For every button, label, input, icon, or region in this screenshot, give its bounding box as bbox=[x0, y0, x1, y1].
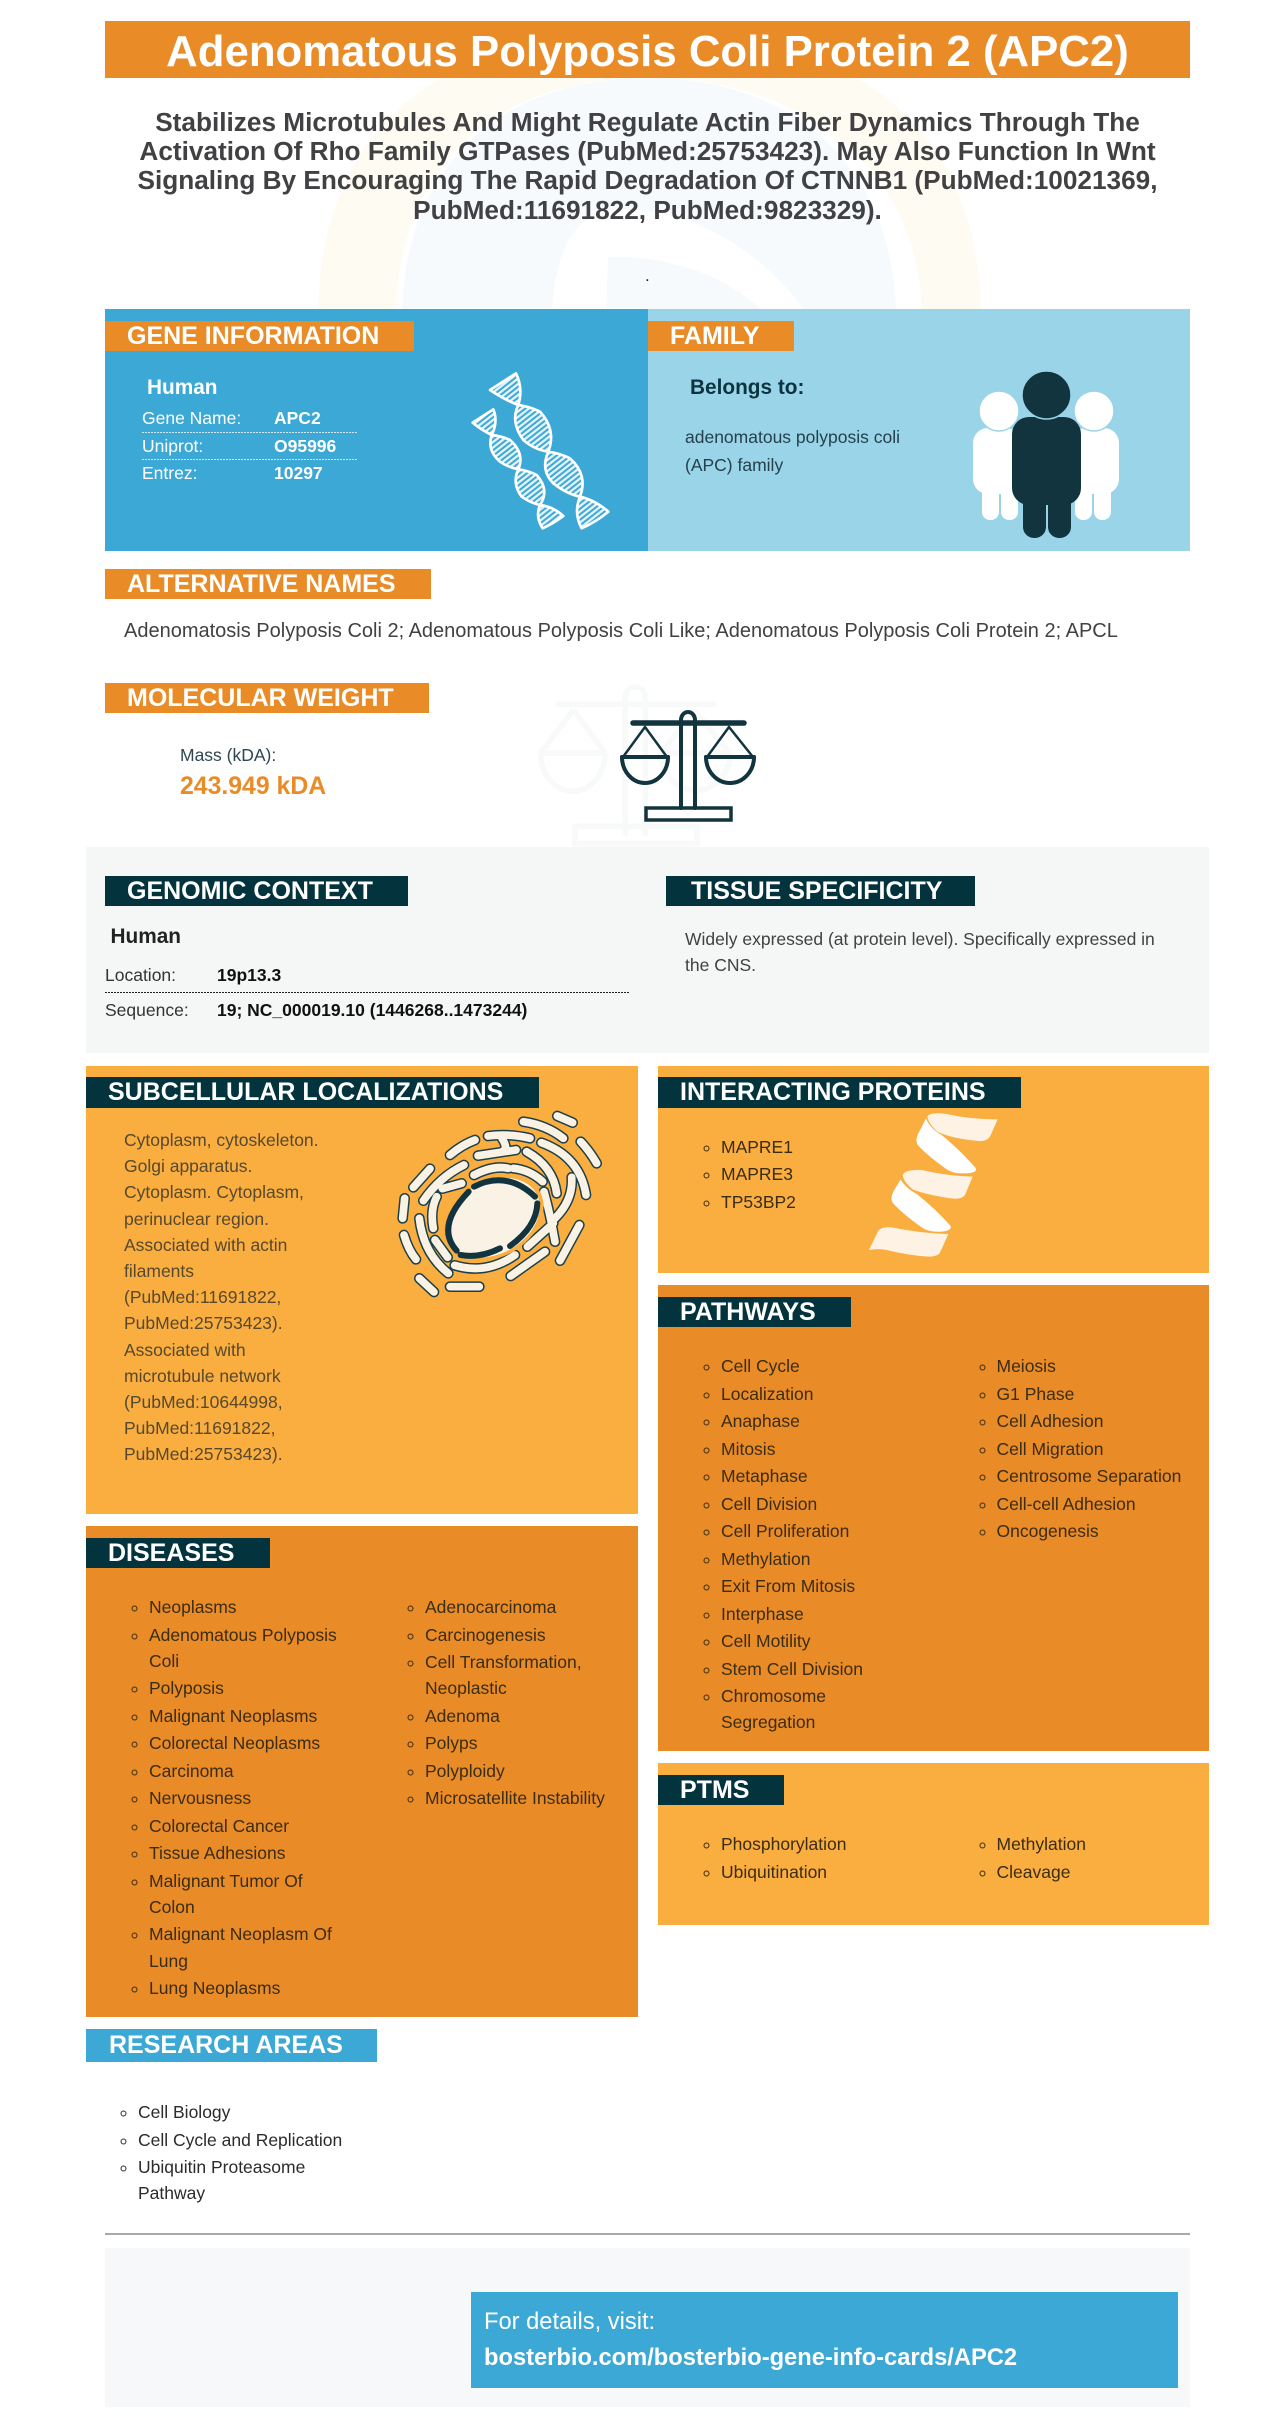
heading: diseases: DISEASES bbox=[108, 1539, 234, 1567]
pathways list column 1: Segregation bbox=[721, 1712, 815, 1732]
ghost scale watermark bbox=[537, 687, 732, 845]
pathways list column 1: Methylation bbox=[721, 1548, 810, 1568]
interacting proteins list: MAPRE3 bbox=[721, 1164, 793, 1184]
genomic details: Sequence: bbox=[105, 1000, 189, 1020]
genomic details: 19p13.3 bbox=[217, 965, 281, 985]
diseases list column 2: Polyps bbox=[425, 1733, 478, 1753]
research areas list: Pathway bbox=[138, 2183, 205, 2203]
gene details table: Gene Name: bbox=[142, 408, 241, 428]
research areas list: Cell Cycle and Replication bbox=[138, 2130, 342, 2150]
pathways list column 1: Cell Proliferation bbox=[721, 1521, 849, 1541]
icon: dna helix bbox=[471, 372, 610, 530]
pathways list column 1: Cell Division bbox=[721, 1494, 817, 1514]
localization text: Golgi apparatus. bbox=[124, 1156, 252, 1176]
localization text: perinuclear region. bbox=[124, 1209, 269, 1229]
pathways list column 1: Stem Cell Division bbox=[721, 1658, 863, 1678]
heading: interacting proteins: INTERACTING PROTEINS bbox=[680, 1078, 986, 1106]
description text: PubMed:11691822, PubMed:9823329). bbox=[413, 195, 882, 225]
localization text: Cytoplasm, cytoskeleton. bbox=[124, 1130, 319, 1150]
localization text: (PubMed:10644998, bbox=[124, 1392, 283, 1412]
panel: footer bbox=[105, 2248, 1190, 2407]
diseases list column 2: Microsatellite Instability bbox=[425, 1788, 605, 1808]
species label: Human bbox=[110, 925, 181, 948]
icon: cell with organelles bbox=[397, 1110, 602, 1298]
diseases list column 2: Carcinogenesis bbox=[425, 1624, 546, 1644]
heading: pathways bbox=[658, 1297, 851, 1327]
callout: details link bbox=[471, 2292, 1178, 2388]
ptms list column 2 bbox=[980, 1834, 1086, 1882]
heading: pathways: PATHWAYS bbox=[680, 1298, 816, 1326]
gene details table: APC2 bbox=[274, 408, 321, 428]
localization text bbox=[124, 1130, 319, 1464]
heading: molecular weight: MOLECULAR WEIGHT bbox=[127, 684, 394, 712]
ptms list column 1: Phosphorylation bbox=[721, 1834, 846, 1854]
pathways list column 1: Cell Cycle bbox=[721, 1356, 800, 1376]
panel: subcellular localizations bbox=[86, 1066, 638, 1514]
family name bbox=[685, 427, 900, 474]
diseases list column 1: Polyposis bbox=[149, 1678, 224, 1698]
diseases list column 1: Coli bbox=[149, 1651, 179, 1671]
ptms list column 1 bbox=[704, 1834, 846, 1882]
genomic details bbox=[105, 965, 629, 1020]
description text: Activation Of Rho Family GTPases (PubMed:25753423). May Also Function In Wnt bbox=[139, 136, 1156, 166]
callout url: bosterbio.com/bosterbio-gene-info-cards/APC2 bbox=[484, 2345, 1017, 2371]
ptms list column 2: Methylation bbox=[996, 1834, 1086, 1854]
heading: research areas bbox=[86, 2029, 377, 2062]
pathways list column 1: Interphase bbox=[721, 1604, 804, 1624]
heading: ptms: PTMS bbox=[680, 1776, 749, 1804]
diseases list column 2: Adenoma bbox=[425, 1706, 500, 1726]
mass label: Mass (kDA): bbox=[180, 745, 276, 765]
pathways list column 2: G1 Phase bbox=[996, 1384, 1074, 1404]
separator dot: . bbox=[645, 266, 650, 285]
pathways list column 2: Cell Migration bbox=[996, 1438, 1103, 1458]
pathways list column 1 bbox=[704, 1356, 863, 1732]
callout label: For details, visit: bbox=[484, 2309, 655, 2335]
diseases list column 1: Nervousness bbox=[149, 1788, 251, 1808]
diseases list column 2: Polyploidy bbox=[425, 1761, 505, 1781]
background logo watermark bbox=[318, 78, 980, 309]
localization text: PubMed:25753423). bbox=[124, 1444, 283, 1464]
gene details table: Entrez: bbox=[142, 463, 197, 483]
pathways list column 2: Meiosis bbox=[996, 1356, 1056, 1376]
icon: group of people bbox=[973, 372, 1119, 538]
research areas list: Ubiquitin Proteasome bbox=[138, 2157, 305, 2177]
genomic details: Location: bbox=[105, 965, 176, 985]
localization text: Associated with bbox=[124, 1340, 246, 1360]
pathways list column 2: Cell Adhesion bbox=[996, 1411, 1104, 1431]
belongs to label: Belongs to: bbox=[690, 376, 804, 399]
diseases list column 1: Malignant Neoplasm Of bbox=[149, 1924, 332, 1944]
genomic details: 19; NC_000019.10 (1446268..1473244) bbox=[217, 1000, 527, 1020]
species label: Human bbox=[147, 376, 217, 399]
gene details table: 10297 bbox=[274, 463, 323, 483]
panel: genomic context and tissue specificity bbox=[86, 847, 1209, 1053]
interacting proteins list: MAPRE1 bbox=[721, 1136, 793, 1156]
pathways list column 1: Mitosis bbox=[721, 1438, 775, 1458]
pathways list column 1: Metaphase bbox=[721, 1466, 808, 1486]
description text bbox=[137, 107, 1158, 225]
gene details table: O95996 bbox=[274, 436, 336, 456]
ptms list column 2: Cleavage bbox=[996, 1862, 1070, 1882]
pathways list column 1: Exit From Mitosis bbox=[721, 1576, 855, 1596]
localization text: Associated with actin bbox=[124, 1235, 287, 1255]
panel: interacting proteins bbox=[658, 1066, 1209, 1273]
heading: diseases bbox=[86, 1538, 270, 1568]
icon: protein ribbon bbox=[869, 1113, 998, 1257]
description text: Signaling By Encouraging The Rapid Degradation Of CTNNB1 (PubMed:10021369, bbox=[137, 165, 1158, 195]
diseases list column 2: Adenocarcinoma bbox=[425, 1597, 556, 1617]
gene details table: Uniprot: bbox=[142, 436, 203, 456]
pathways list column 1: Anaphase bbox=[721, 1411, 800, 1431]
panel: ptms bbox=[658, 1763, 1209, 1925]
localization text: PubMed:25753423). bbox=[124, 1313, 283, 1333]
panel: family bbox=[648, 309, 1190, 551]
icon: balance scale bbox=[620, 710, 756, 822]
diseases list column 1: Carcinoma bbox=[149, 1761, 234, 1781]
research areas list bbox=[120, 2102, 342, 2203]
diseases list column 1: Colorectal Cancer bbox=[149, 1816, 289, 1836]
heading: family bbox=[648, 321, 794, 351]
tissue specificity text: the CNS. bbox=[685, 955, 756, 975]
diseases list column 2: Neoplastic bbox=[425, 1678, 507, 1698]
description text: Stabilizes Microtubules And Might Regulate Actin Fiber Dynamics Through The bbox=[155, 107, 1140, 137]
heading: tissue specificity: TISSUE SPECIFICITY bbox=[691, 877, 942, 905]
pathways list column 2: Centrosome Separation bbox=[996, 1466, 1181, 1486]
interacting proteins list bbox=[704, 1136, 796, 1212]
mass value: 243.949 kDA bbox=[180, 772, 326, 800]
diseases list column 1: Malignant Tumor Of bbox=[149, 1871, 303, 1891]
heading: ptms bbox=[658, 1775, 784, 1805]
heading: research areas: RESEARCH AREAS bbox=[109, 2031, 343, 2059]
diseases list column 1: Lung Neoplasms bbox=[149, 1978, 280, 1998]
heading: family: FAMILY bbox=[670, 322, 759, 350]
heading: subcellular localizations: SUBCELLULAR LOCALIZATIONS bbox=[108, 1078, 503, 1106]
diseases list column 1 bbox=[132, 1597, 337, 1998]
pathways list column 2: Oncogenesis bbox=[996, 1521, 1099, 1541]
diseases list column 1: Colon bbox=[149, 1897, 195, 1917]
diseases list column 1: Colorectal Neoplasms bbox=[149, 1733, 320, 1753]
research areas list: Cell Biology bbox=[138, 2102, 230, 2122]
localization text: microtubule network bbox=[124, 1366, 281, 1386]
pathways list column 1: Localization bbox=[721, 1384, 813, 1404]
panel: diseases bbox=[86, 1526, 638, 2017]
panel: gene information bbox=[105, 309, 648, 551]
tissue specificity text: Widely expressed (at protein level). Specifically expressed in bbox=[685, 929, 1155, 949]
localization text: Cytoplasm. Cytoplasm, bbox=[124, 1182, 304, 1202]
interacting proteins list: TP53BP2 bbox=[721, 1192, 796, 1212]
diseases list column 1: Lung bbox=[149, 1951, 188, 1971]
ptms list column 1: Ubiquitination bbox=[721, 1862, 827, 1882]
tissue specificity text bbox=[685, 929, 1155, 975]
diseases list column 2 bbox=[408, 1597, 605, 1808]
localization text: filaments bbox=[124, 1261, 194, 1281]
alternative names text: Adenomatosis Polyposis Coli 2; Adenomatous Polyposis Coli Like; Adenomatous Polyposis Coli Protein 2; APCL bbox=[124, 620, 1118, 642]
pathways list column 2 bbox=[980, 1356, 1181, 1541]
title banner: Adenomatous Polyposis Coli Protein 2 (APC2) bbox=[166, 27, 1129, 76]
diseases list column 1: Malignant Neoplasms bbox=[149, 1706, 317, 1726]
pathways list column 2: Cell-cell Adhesion bbox=[996, 1494, 1136, 1514]
family name: adenomatous polyposis coli bbox=[685, 427, 900, 447]
diseases list column 1: Neoplasms bbox=[149, 1597, 237, 1617]
heading: alternative names: ALTERNATIVE NAMES bbox=[127, 570, 396, 598]
family name: (APC) family bbox=[685, 454, 783, 474]
gene details table bbox=[142, 408, 357, 483]
panel: pathways bbox=[658, 1285, 1209, 1751]
heading: genomic context: GENOMIC CONTEXT bbox=[127, 877, 373, 905]
localization text: PubMed:11691822, bbox=[124, 1418, 275, 1438]
diseases list column 1: Adenomatous Polyposis bbox=[149, 1624, 337, 1644]
pathways list column 1: Chromosome bbox=[721, 1686, 826, 1706]
diseases list column 2: Cell Transformation, bbox=[425, 1652, 582, 1672]
localization text: (PubMed:11691822, bbox=[124, 1287, 281, 1307]
pathways list column 1: Cell Motility bbox=[721, 1631, 810, 1651]
heading: gene information: GENE INFORMATION bbox=[127, 322, 379, 350]
diseases list column 1: Tissue Adhesions bbox=[149, 1843, 286, 1863]
